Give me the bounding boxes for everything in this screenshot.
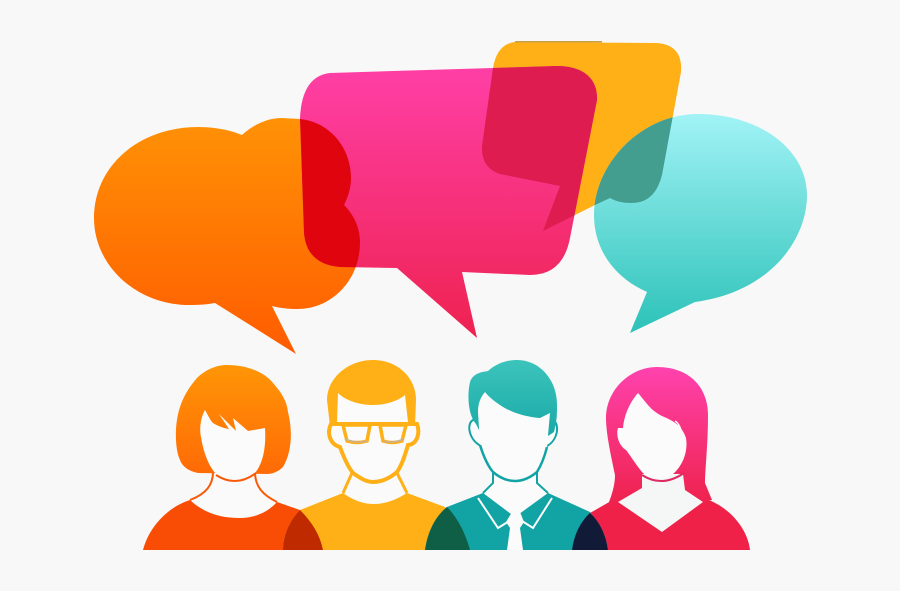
person: woman with orange bob — [143, 365, 323, 550]
speech bubble: orange — [94, 118, 360, 354]
orange top — [143, 500, 323, 550]
yellow hair — [327, 360, 416, 426]
forehead — [337, 393, 408, 422]
speech bubble: teal — [594, 114, 807, 333]
overlap: orange and yellow shirts — [283, 510, 323, 550]
overlap: yellow and teal — [594, 117, 673, 206]
jaw line — [480, 445, 547, 481]
tie — [506, 512, 524, 550]
chin line — [642, 473, 684, 481]
neck and V collar — [618, 474, 703, 532]
long pink hair — [606, 367, 712, 507]
overlap: yellow and teal shirts — [425, 507, 470, 550]
neck — [483, 470, 548, 517]
speech bubble: yellow — [482, 42, 681, 231]
neck — [190, 470, 277, 518]
person: man in teal suit — [425, 360, 608, 550]
overlap: orange and pink — [300, 119, 360, 268]
face — [200, 410, 265, 481]
illustration: four people with speech bubbles — [94, 41, 807, 550]
person: man with yellow hair and glasses — [283, 360, 470, 550]
overlap: yellow and pink — [482, 66, 598, 231]
face — [478, 392, 550, 481]
yellow shirt — [283, 493, 470, 550]
neck — [343, 470, 407, 504]
person: woman with pink hair — [590, 367, 750, 550]
speech bubble: pink — [300, 66, 597, 338]
orange hair — [176, 365, 291, 474]
collar lines — [478, 498, 552, 528]
head and ears — [329, 424, 418, 482]
red top — [590, 497, 750, 550]
face — [617, 393, 686, 479]
ears — [469, 420, 557, 446]
teal jacket — [425, 493, 608, 550]
glasses — [343, 425, 406, 442]
chin line — [216, 473, 256, 481]
hair highlight — [675, 421, 682, 434]
teal hair — [468, 360, 557, 436]
overlap: teal and red shirts — [572, 513, 608, 550]
